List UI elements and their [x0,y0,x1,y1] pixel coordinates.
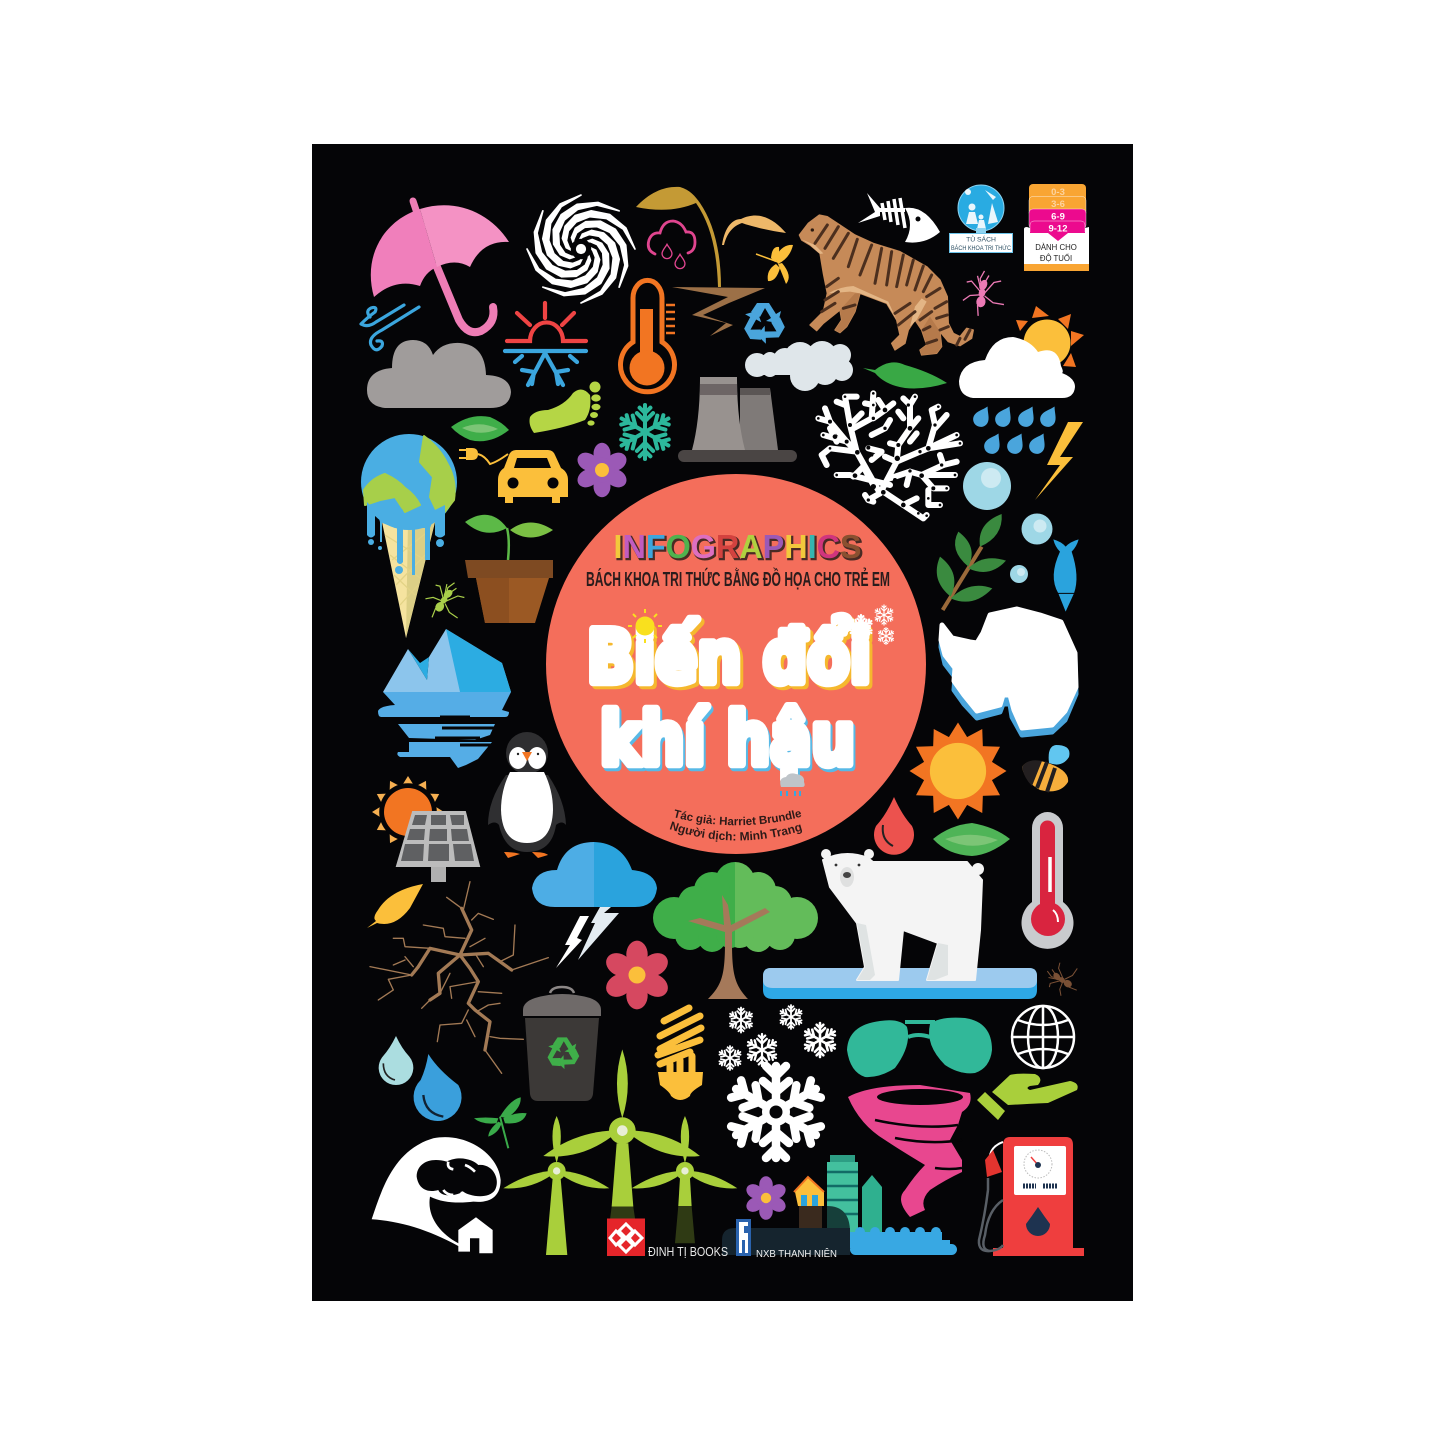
icon: tiger [799,215,973,355]
age range badge: 9-12 [1048,224,1068,234]
icon: sprouting gold plant on cracked ground [636,187,786,336]
icon: red thermometer [1021,812,1074,949]
icon: purple flower small [744,1176,788,1220]
icon: blood drop [874,797,914,855]
main title line two: khí hậu [602,700,857,784]
icon: iceberg [378,629,511,768]
icon: wind turbines [503,1049,737,1255]
main title line one: Biến đổi [587,615,871,699]
Thanh Nien publisher logo [736,1219,837,1260]
icon: wire globe [1012,1006,1074,1068]
black book cover [312,144,1133,1301]
icon: green leaf right [933,823,1010,856]
icon: fish skeleton [858,193,940,243]
icon: orange sun [910,722,1006,820]
icon: white lightning bolts [556,907,619,968]
icon: Antarctica [941,609,1076,735]
icon: tu sach logo [950,185,1012,252]
main title line two: khí hậu [600,697,855,781]
icon: green hand [977,1074,1078,1120]
icon: green leaf small [451,416,509,441]
icon: tsunami wave [372,1137,501,1253]
icon: sun behind white cloud [959,306,1084,398]
icon: cooling towers [678,377,797,462]
icon: sun with solar panel [372,776,479,882]
age range badge: DÀNH CHO [1035,243,1077,252]
icon: plant in pot [465,515,553,623]
icon: grey cloud [367,340,511,408]
icon: orange thermometer [620,280,675,392]
icon: pale cloud [745,341,853,391]
icon: green dragonfly [474,1097,527,1148]
icon: raindrops [970,403,1061,457]
age range badge: 3-6 [1051,199,1065,210]
icon: bee [1022,745,1069,792]
icon: small sun on title [628,609,662,643]
icon: red flower [602,941,672,1009]
icon: snowflakes on title [849,605,895,644]
age range badge: 6-9 [1051,212,1065,222]
icon: yellow lightning [1035,422,1083,500]
icon: bubbles [963,462,1052,583]
icon: teal snowflake [618,405,672,459]
icon: green leaf [863,362,947,388]
icon: tu sach logo: BÁCH KHOA TRI THỨC [951,243,1011,252]
icon: purple flower [574,443,630,497]
icon: yellow electric car [459,448,568,503]
subtitle: BÁCH KHOA TRI THỨC BẰNG ĐỒ HỌA CHO TRẺ EM [586,567,890,591]
Dinh Ti publisher logo: ĐINH TỊ BOOKS [648,1245,728,1259]
flooded city scene [722,1155,957,1255]
icon: blue cloud [532,842,657,907]
icon: green tree [653,862,818,999]
author credits: Tác giả: Harriet Brundle [674,809,802,826]
icon: blue recycle symbol [738,303,788,348]
book cover infographic [312,144,1133,1301]
age range badge [1024,184,1089,271]
author credits [670,809,802,842]
icon: sun and snow [505,303,586,385]
icon: yellow leaf [367,884,423,928]
icon: ground cracks [370,882,548,1073]
series title: INFOGRAPHICS [615,530,863,566]
icon: brown ant [1040,955,1088,1002]
icon: green footprint [530,382,601,433]
icon: green branch [937,514,1006,610]
Dinh Ti publisher logo [607,1218,728,1259]
central coral circle panel [546,474,926,854]
icon: yellow dragonfly [756,245,793,284]
icon: energy saving bulb [658,1008,703,1100]
icon: penguin [488,732,566,858]
icon: pink ant [959,267,1011,322]
icon: earth melting as ice cream [361,434,457,638]
icon: large snowflake [730,1066,822,1158]
series title: INFOGRAPHICS [614,528,862,565]
icon: green ant [418,574,474,630]
age range badge: 0-3 [1051,187,1065,198]
icon: polar bear on ice [763,849,1037,999]
icon: blue fish [1053,539,1079,612]
icon: tu sach logo: TỦ SÁCH [966,234,996,244]
icon: wind [361,305,419,350]
icon: fuel pump [979,1137,1084,1256]
icon: small rain cloud [780,773,805,796]
icon: coral [817,392,961,518]
icon: scattered snowflakes [718,1005,837,1070]
icon: pink umbrella [371,201,509,332]
icon: pink rain cloud [648,221,695,269]
icon: spiral hurricane [516,184,646,314]
icon: teal sunglasses [847,1018,992,1077]
icon: trash bin with recycle [523,987,601,1101]
author credits: Người dịch: Minh Trang [670,821,802,842]
Thanh Nien publisher logo: NXB THANH NIÊN [756,1247,837,1260]
icon: pink tornado [848,1085,971,1217]
icon: water drops [379,1036,462,1121]
main title line one: Biến đổi [590,618,874,702]
age range badge: ĐỘ TUỔI [1040,254,1072,263]
